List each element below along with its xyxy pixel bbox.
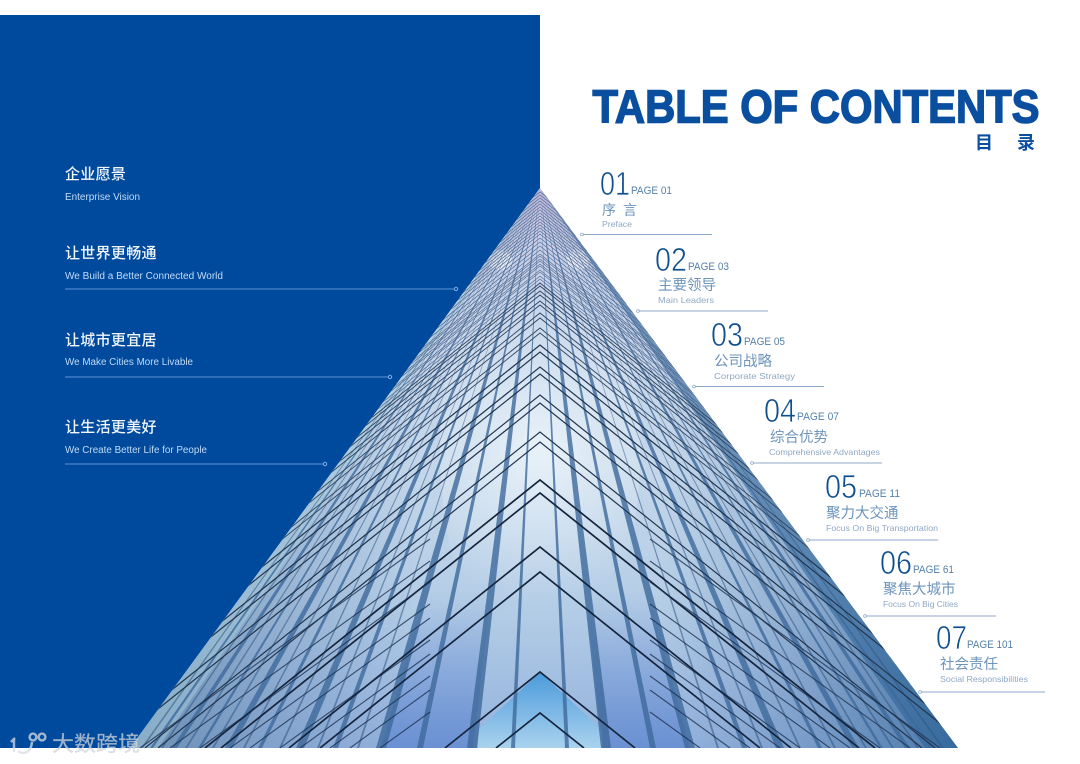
- contents item 06: Focus On Big Cities: [883, 599, 958, 609]
- contents item 04: Comprehensive Advantages: [769, 447, 880, 457]
- main radial mullions: [150, 188, 933, 748]
- contents item 07: Social Responsibilities: [940, 674, 1028, 684]
- contents item 05: PAGE 11: [859, 488, 900, 500]
- contents item 05: 聚力大交通: [826, 504, 899, 522]
- heading: chinese subtitle: 录: [1017, 133, 1035, 153]
- left slogan: better connected world: 让世界更畅通: [65, 245, 157, 262]
- contents item 03: Corporate Strategy: [714, 371, 796, 381]
- heading: table of contents: [592, 80, 1040, 153]
- contents item 02: PAGE 03: [688, 261, 729, 273]
- left slogan: more livable cities: 让城市更宜居: [65, 331, 157, 349]
- tower edge tints: [130, 188, 540, 748]
- contents item 04: 04: [764, 392, 796, 429]
- contents item 04: [751, 392, 882, 464]
- contents item 01: Preface: [602, 219, 632, 229]
- contents item 06: 聚焦大城市: [883, 581, 956, 598]
- contents item 01: 01: [600, 165, 630, 202]
- contents item 01: 序: [602, 202, 616, 218]
- left slogan: more livable cities: We Make Cities More Livable: [65, 357, 193, 368]
- contents item 03: 03: [711, 316, 743, 353]
- left slogan: better life: We Create Better Life for People: [65, 445, 207, 456]
- heading: chinese subtitle: 目: [975, 133, 993, 153]
- contents item 05: 05: [825, 468, 857, 505]
- side facade floor lines: [140, 539, 940, 748]
- left slogan: more livable cities: [65, 331, 392, 379]
- glass base tone: [130, 188, 958, 748]
- chevron floor lines, lower: [205, 480, 875, 748]
- contents item 03: 公司战略: [714, 353, 772, 370]
- lower core glass panels: [478, 672, 602, 748]
- contents item 01: 言: [623, 202, 637, 218]
- photo: glass tower in perspective: [130, 188, 958, 748]
- contents item 04: 综合优势: [770, 429, 828, 446]
- contents item 03: [693, 316, 824, 388]
- contents item 06: [864, 544, 996, 617]
- contents item 02: [637, 241, 768, 312]
- contents item 06: PAGE 61: [913, 564, 954, 576]
- icon: watermark logo: [11, 734, 45, 753]
- watermark: logo and brand name: 大数跨境: [52, 733, 140, 756]
- chevron floor lines, middle: [133, 345, 947, 748]
- heading: table of contents: TABLE OF CONTENTS: [592, 80, 1040, 132]
- contents item 07: PAGE 101: [967, 639, 1013, 651]
- contents item 05: [807, 468, 938, 541]
- contents item 06: 06: [880, 544, 912, 581]
- contents item 01: [581, 165, 712, 236]
- contents item 07: 07: [936, 619, 967, 656]
- left slogan: better connected world: We Build a Better Connected World: [65, 271, 223, 282]
- secondary radial mullions: [141, 188, 944, 748]
- watermark: logo and brand name: [11, 733, 140, 756]
- contents item 07: 社会责任: [940, 656, 998, 673]
- left slogan: enterprise vision: [65, 165, 140, 203]
- left slogan: enterprise vision: Enterprise Vision: [65, 192, 140, 203]
- chevron floor lines, upper: [265, 283, 815, 553]
- left slogan: better life: 让生活更美好: [65, 418, 157, 436]
- left slogan: better life: [65, 418, 327, 466]
- chevron floor lines, near apex: [368, 192, 712, 417]
- contents item 01: PAGE 01: [631, 185, 672, 197]
- left slogan: enterprise vision: 企业愿景: [65, 165, 126, 183]
- panel: blue background: [0, 15, 540, 748]
- contents item 02: 02: [655, 241, 687, 278]
- contents item 02: 主要领导: [658, 277, 716, 294]
- contents item 07: [919, 619, 1045, 693]
- contents item 04: PAGE 07: [797, 411, 839, 423]
- contents item 05: Focus On Big Transportation: [826, 523, 938, 533]
- left slogan: better connected world: [65, 245, 458, 291]
- contents item 03: PAGE 05: [744, 336, 785, 348]
- contents item 02: Main Leaders: [658, 295, 714, 305]
